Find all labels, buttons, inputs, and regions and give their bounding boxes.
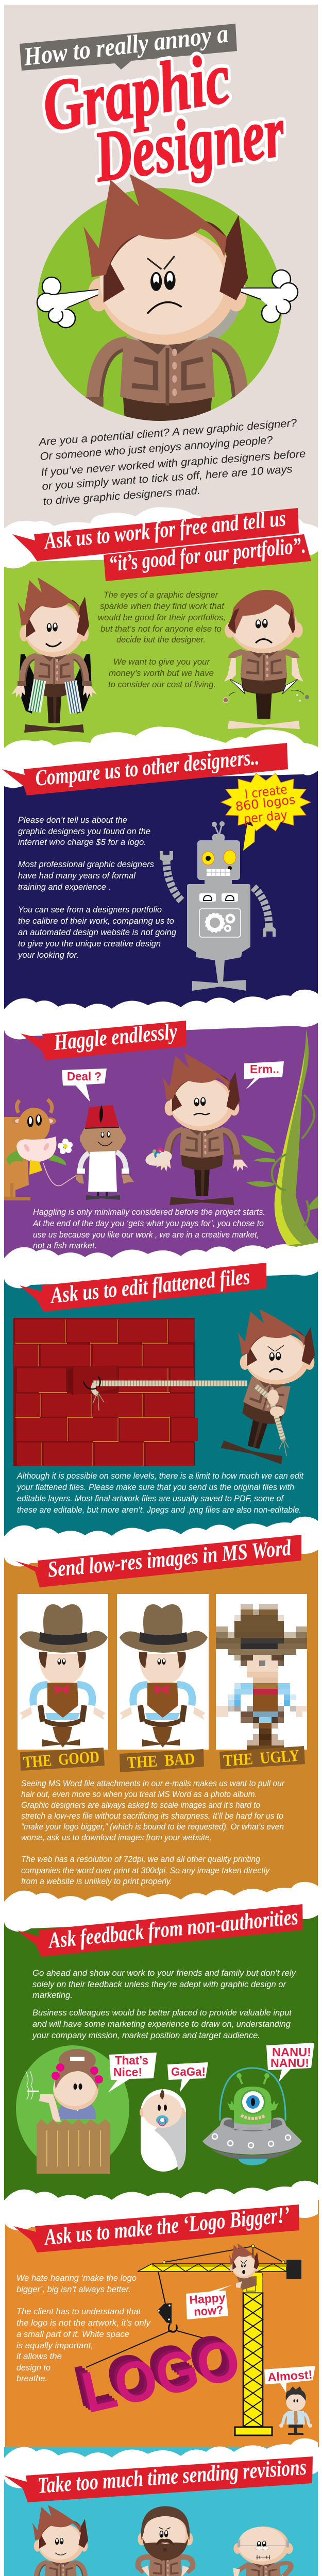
card: the bad cowboy (117, 1594, 209, 1750)
speech bubble: Almost: Almost! (267, 2368, 313, 2384)
icon: steam right (241, 270, 298, 323)
panel: intro (20, 24, 305, 505)
panel: low-res images in MS Word (4, 1535, 318, 1891)
character: designer pulling rope (221, 1309, 315, 1464)
title banner: How to really annoy a: How to really annoy a (22, 19, 230, 71)
banner: Haggle endlessly: Haggle endlessly (53, 1019, 178, 1055)
text block (98, 590, 226, 689)
speech bubble: Almost (264, 2366, 315, 2393)
speech bubble: Deal (62, 1069, 107, 1102)
text block: Business colleagues would be better placed to provide valuable input (32, 2008, 292, 2018)
intro text: Or someone who just enjoys annoying people? (40, 434, 274, 463)
text block: sparkle when they find work that (100, 601, 225, 611)
text block: You can see from a designers portfolio (18, 905, 162, 914)
banner: Compare us to other designers (2, 743, 288, 795)
text block: The client has to understand that (16, 2307, 141, 2316)
intro text: to drive graphic designers mad. (43, 485, 201, 507)
text block: Haggling is only minimally considered before the project starts. (33, 1207, 265, 1217)
text block: to give you the unique creative design (18, 939, 161, 948)
title: Graphic Designer (37, 38, 290, 197)
panel: edit flattened files (4, 1257, 318, 1520)
speech bubble: Deal: Deal ? (67, 1070, 101, 1083)
text block: bigger’, big isn’t always better. (16, 2284, 131, 2294)
text block: an automated design website is not going (18, 927, 177, 937)
text block: the calibre of their work, comparing us to (18, 916, 174, 926)
speech bubble: Happy now: Happy (189, 2291, 226, 2307)
character: baby (140, 2089, 186, 2172)
text block: editable layers. Most final artwork files are usually saved to PDF, some of (17, 1494, 284, 1503)
label: the ugly: THE UGLY (223, 1746, 300, 1770)
character: initial proof young designer (27, 2505, 94, 2576)
banner: Haggle endlessly (21, 1019, 186, 1060)
text block: your flattened files. Please make sure that you send us the original files with (16, 1482, 294, 1492)
banner: Ask feedback from non-authorities (18, 1904, 303, 1957)
text block (18, 815, 177, 960)
panel: feedback from non-authorities (4, 1904, 318, 2190)
illustration: LOGO 3D letters: LOGO (68, 2320, 238, 2419)
intro text: or you simply want to tick us off, here are 10 ways (42, 463, 293, 493)
illustration: LOGO 3D letters: LOGO (76, 2327, 246, 2425)
text block (16, 2273, 151, 2383)
panel: haggle endlessly (4, 1010, 318, 1252)
text block: it allows the (16, 2351, 62, 2361)
callout: I create 860 logos per day: per day (243, 807, 288, 826)
banner: Ask us to edit flattened files (20, 1263, 266, 1312)
banner: Ask us to work for free and tell us (12, 505, 299, 561)
text block: not a fish market. (33, 1241, 97, 1250)
text block: use us because you like our work , we are in a creative market, (33, 1230, 259, 1240)
speech bubble: Erm (244, 1061, 284, 1090)
text block: and will have some marketing experience to draw on, understanding (32, 2019, 291, 2029)
text block (32, 1207, 265, 1250)
intro text: Are you a potential client? A new graphic designer? (38, 417, 297, 448)
banner: Ask us to edit flattened files: Ask us to edit flattened files (48, 1264, 251, 1308)
label: the bad: THE BAD (126, 1749, 195, 1772)
text block: would be good for their portfolios, (98, 613, 226, 622)
callout: I create 860 logos per day (221, 773, 311, 851)
illustration: LOGO 3D letters: LOGO (73, 2325, 243, 2423)
speech bubble: GaGa: GaGa! (171, 2065, 206, 2078)
text block: solely on their feedback unless they’re adept with graphic design or (32, 1979, 286, 1989)
character: happy designer with portfolio (11, 578, 97, 733)
text block: these are editable, but more aren’t. Jpegs and .png files are also non-editable. (17, 1505, 301, 1515)
text block: We hate hearing ‘make the logo (16, 2273, 137, 2283)
text block: “make your logo bigger,” (which is bound to be requested). Or what’s even (21, 1822, 284, 1832)
title: Graphic Designer: Graphic (37, 38, 235, 147)
character: client (279, 2386, 312, 2435)
illustration: robot (160, 821, 276, 991)
card: the ugly pixelated cowboy (216, 1594, 307, 1750)
callout: I create 860 logos per day: 860 logos (234, 792, 296, 814)
speech bubble: Happy now (186, 2285, 232, 2319)
text block: Seeing MS Word file attachments in our e-mails makes us want to pull our (21, 1778, 285, 1788)
text block: a small part of it. White space (16, 2329, 129, 2339)
character: neighbour behind fence (16, 2045, 129, 2174)
speech bubble: NANU NANU: NANU! (272, 2045, 311, 2059)
character: market trader with fez (75, 1105, 134, 1200)
speech bubble: Erm: Erm.. (250, 1062, 279, 1076)
text block: money’s worth but we have (109, 668, 214, 678)
character: sad designer with empty pockets (223, 590, 309, 729)
text block: to consider our cost of living. (108, 680, 216, 689)
text block: the logo is not the artwork, it’s only (16, 2318, 151, 2328)
text block: The web has a resolution of 72dpi, we and all other quality printing (21, 1854, 260, 1864)
text block: training and experience . (18, 882, 111, 892)
panel: compare us to other designers (2, 743, 318, 1005)
label: the good: THE GOOD (23, 1747, 100, 1771)
text block: is equally important, (16, 2341, 93, 2350)
panel: too much time sending revisions (4, 2454, 318, 2576)
card: the good cowboy (18, 1594, 108, 1750)
intro text: If you’ve never worked with graphic designers before (41, 448, 306, 479)
text block: companies the word over print at 300dpi. So any image taken directly (21, 1866, 270, 1875)
speech bubble: That's Nice (108, 2053, 157, 2093)
text block: Go ahead and show our work to your friends and family but don’t rely (32, 1968, 296, 1978)
text block: marketing. (32, 1990, 73, 2000)
text block: from a website is unlikely to print properly. (21, 1876, 172, 1886)
text block: graphic designers you found on the (18, 826, 150, 836)
illustration: tower crane (86, 2245, 301, 2435)
character: still proofing old man (233, 2527, 293, 2576)
text block (32, 1968, 296, 2040)
character: alien in UFO (202, 2068, 302, 2165)
character: delayed proofs bearded designer (138, 2506, 193, 2576)
icon: steam left (37, 277, 98, 328)
text block: hair out, even more so when you treat MS Word as a photo album. (21, 1789, 257, 1799)
text block: your company mission, market position and target audience. (32, 2030, 260, 2040)
character: designer with beans in hand (144, 1053, 248, 1205)
speech bubble: Happy now: now? (194, 2303, 224, 2318)
text block: your looking for. (18, 950, 79, 960)
speech bubble: GaGa (167, 2062, 208, 2092)
title: Graphic Designer: Graphic (37, 38, 235, 147)
text block: decide but the designer. (116, 635, 206, 645)
banner: Send low-res images in MS Word (15, 1535, 301, 1587)
text block: stretch a low-res file without sacrificing its sharpness. It’ll be hard for us to (21, 1811, 283, 1821)
illustration: LOGO 3D letters: LOGO (71, 2323, 241, 2421)
text block: Most professional graphic designers (18, 859, 154, 869)
speech bubble: That's Nice: Nice! (113, 2065, 142, 2079)
text block: breathe. (16, 2374, 47, 2383)
text block (21, 1778, 285, 1886)
text block: worse, ask us to download images from your website. (21, 1833, 212, 1842)
speech bubble: NANU NANU: NANU! (270, 2056, 309, 2070)
character: designer in crane cab (229, 2244, 259, 2290)
text block: The eyes of a graphic designer (104, 590, 218, 600)
illustration: rope (83, 1377, 247, 1411)
text block: but that’s not for anyone else to (100, 624, 222, 634)
text block: At the end of the day you ‘gets what you pays for’, you chose to (32, 1218, 264, 1228)
illustration: beanstalk (241, 1029, 318, 1247)
intro text (38, 417, 306, 507)
text block: We want to give you your (113, 657, 210, 667)
speech bubble: That's Nice: That’s (115, 2054, 148, 2067)
text block: Please don’t tell us about the (18, 815, 127, 825)
character: cow (4, 1099, 76, 1200)
callout: I create 860 logos per day: I create (244, 782, 288, 802)
panel: ask us to work for free (4, 505, 318, 747)
hero illustration: angry designer in green circle (37, 174, 282, 434)
speech bubble: NANU NANU (266, 2043, 314, 2082)
panel: logo bigger (5, 2202, 319, 2442)
text block: design to (16, 2363, 50, 2372)
text block: have had many years of formal (18, 871, 136, 880)
illustration: brick wall (13, 1318, 198, 1466)
text block: Graphic designers are always asked to scale images and it’s hard to (21, 1800, 260, 1810)
text block (16, 1471, 304, 1515)
text block: internet who charge $5 for a logo. (18, 837, 146, 847)
text block: Although it is possible on some levels, there is a limit to how much we can edit (16, 1471, 304, 1481)
